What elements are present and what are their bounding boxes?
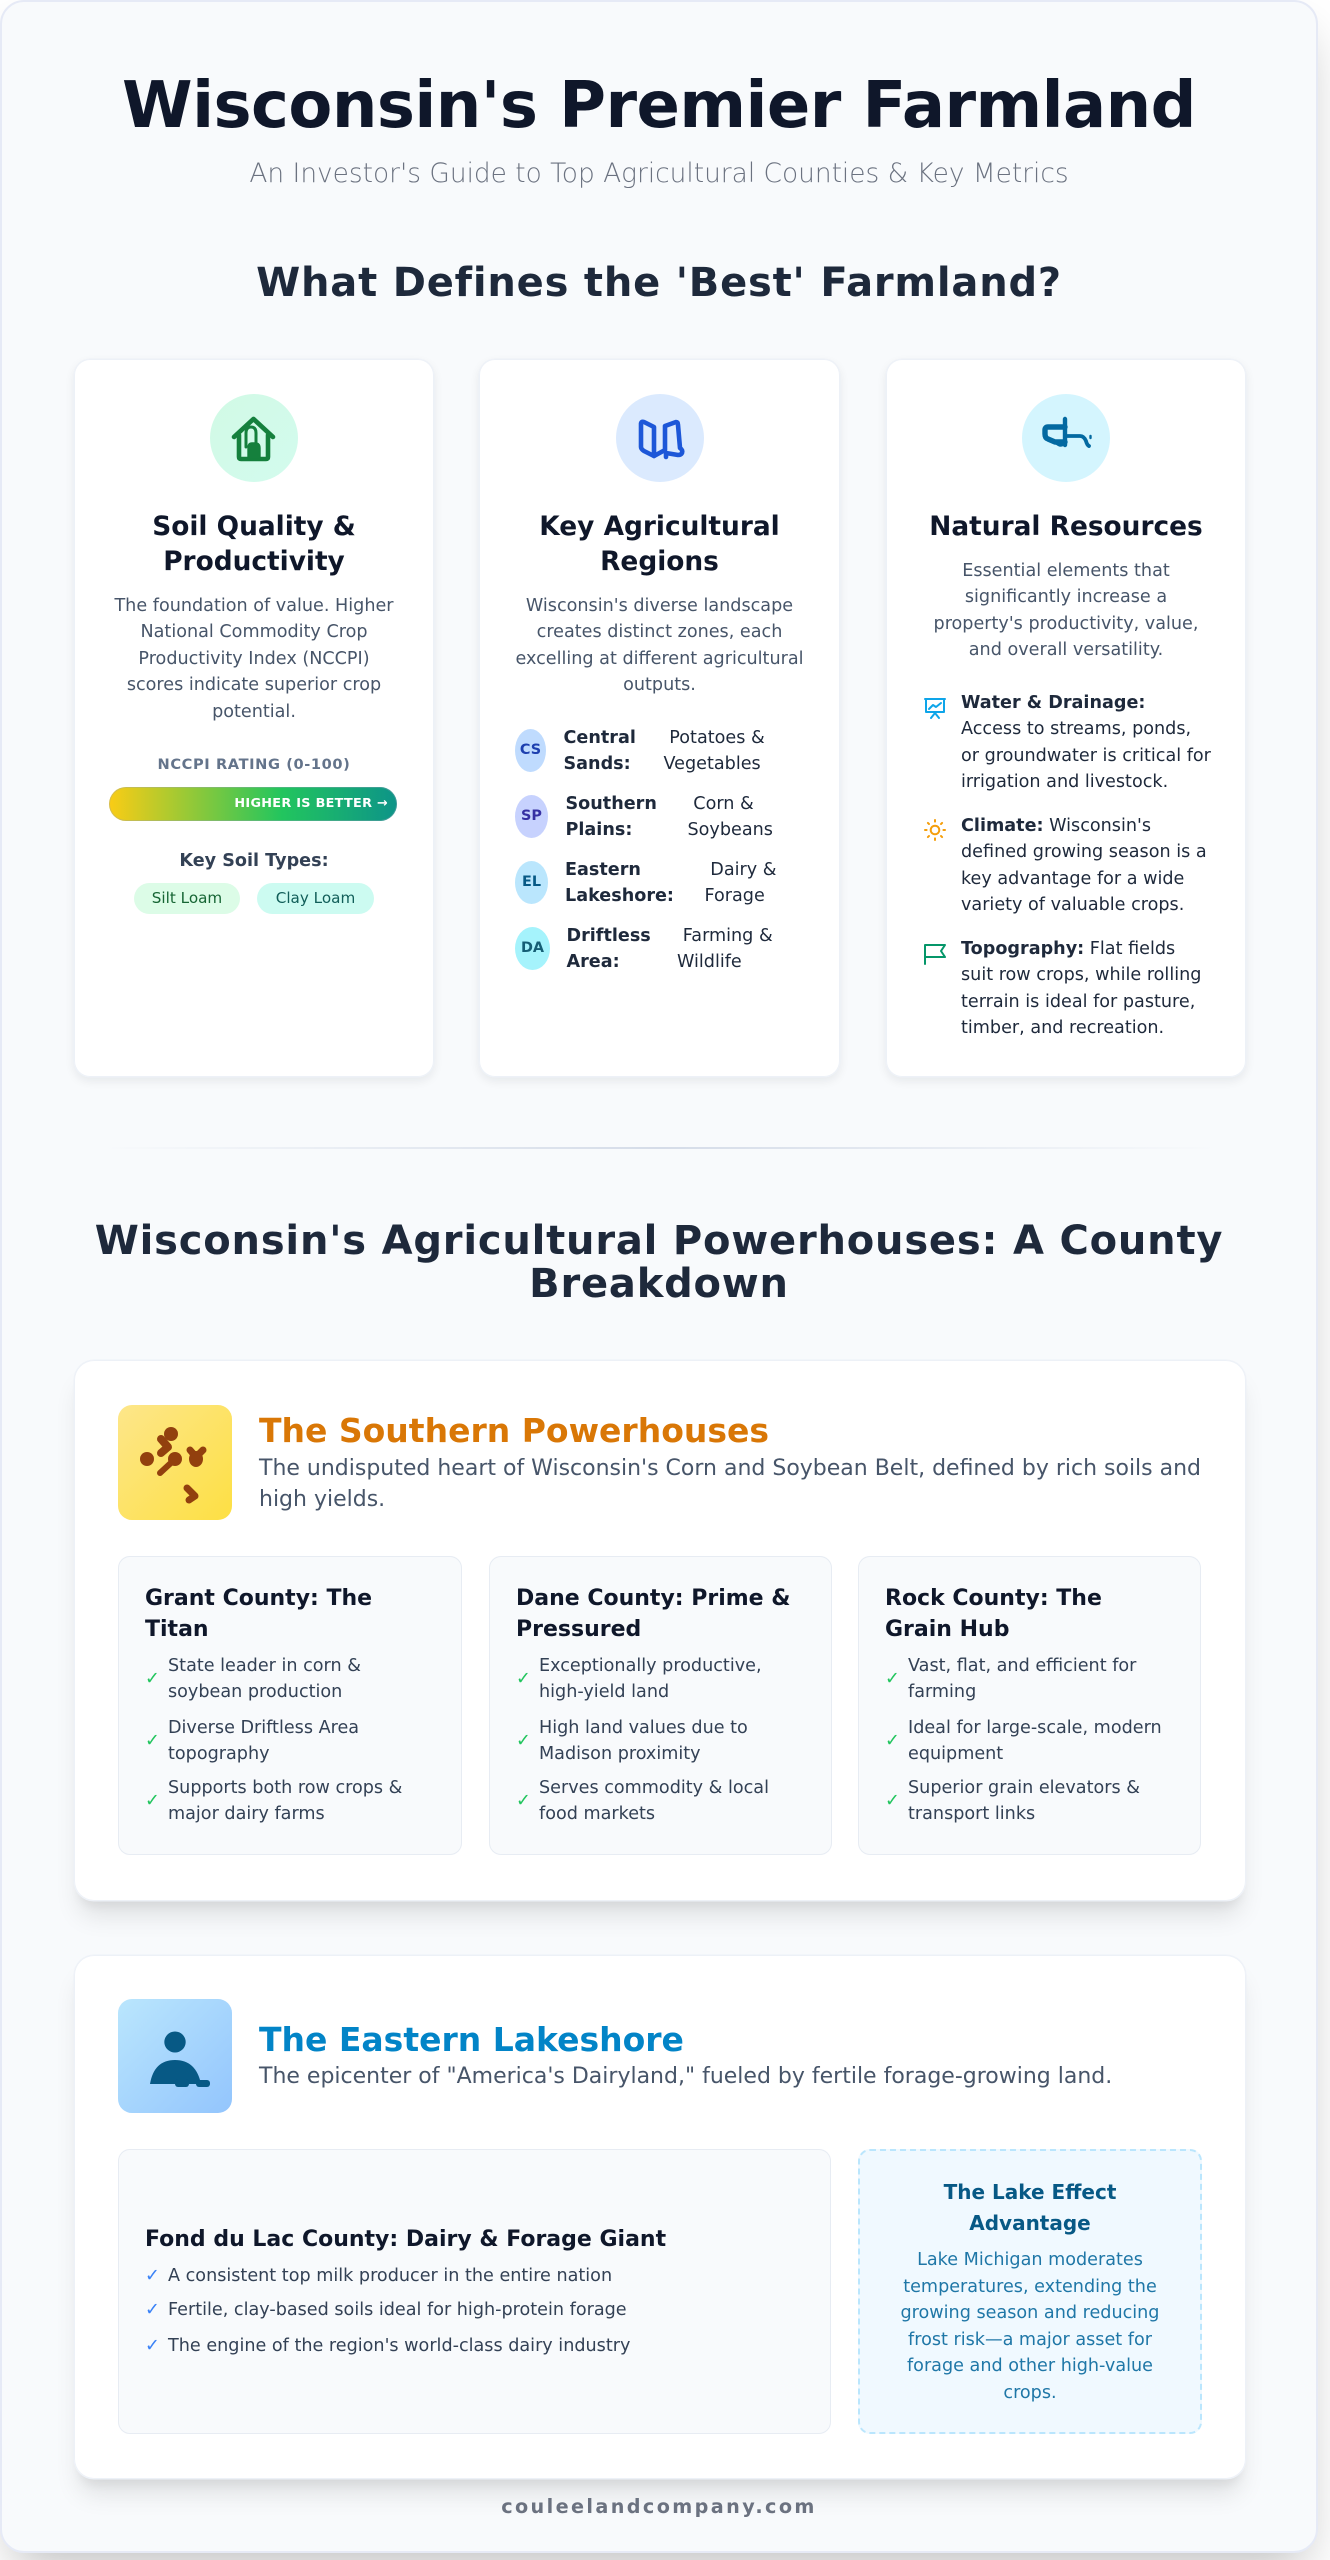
list: dane: high-yield land xyxy=(539,1682,669,1702)
heading: soil quality: Soil Quality & xyxy=(152,511,356,542)
text: water and drainage: Access to streams, ponds, xyxy=(961,719,1191,739)
text: resources description: and overall versatility. xyxy=(969,640,1163,660)
text: lake effect: temperatures, extending the xyxy=(903,2276,1157,2296)
badge: EL: EL xyxy=(522,874,541,890)
text: resources description: property's productivity, value, xyxy=(934,614,1198,634)
checks: rock: ✓ xyxy=(885,1669,900,1689)
heading: grant county: Grant County: The xyxy=(145,1586,372,1611)
icon: dairy farmer xyxy=(118,1999,232,2113)
text: farming xyxy=(677,926,773,972)
label: driftless area: Area: xyxy=(566,952,620,972)
heading: lake effect: Advantage xyxy=(969,2211,1091,2235)
heading: lake effect: The Lake Effect xyxy=(944,2180,1116,2204)
heading: county breakdown xyxy=(95,1218,1223,1307)
panel: key regions xyxy=(479,359,840,1077)
text: lake effect: forage and other high-value xyxy=(907,2356,1153,2376)
label: central sands: Central xyxy=(564,728,636,748)
checks: grant xyxy=(145,1669,160,1811)
label: eastern lakeshore: Lakeshore: xyxy=(565,886,674,906)
checks: dane: ✓ xyxy=(516,1731,531,1751)
text: lake effect: crops. xyxy=(1003,2382,1057,2402)
subtitle: An Investor's Guide to Top Agricultural Counties & Key Metrics xyxy=(249,158,1069,189)
pill: silt loam: Silt Loam xyxy=(152,889,222,907)
badge: SP xyxy=(515,795,548,838)
list: dane 2: High land values due to xyxy=(539,1718,748,1738)
icon: chart board xyxy=(924,698,946,719)
list: driftless area xyxy=(515,926,773,972)
heading: rock county xyxy=(885,1586,1102,1642)
checks: rock: ✓ xyxy=(885,1791,900,1811)
footer: couleelandcompany.com xyxy=(501,2495,817,2518)
list: grant: State leader in corn & xyxy=(168,1656,361,1676)
text: water and drainage: irrigation and livestock. xyxy=(961,772,1168,792)
list: dane 2: Madison proximity xyxy=(539,1744,701,1764)
label: nccpi rating: NCCPI RATING (0-100) xyxy=(158,756,350,773)
list: fond du lac 3: The engine of the region's world-class dairy industry xyxy=(168,2336,630,2356)
text: soil description: Productivity Index (NCCPI) xyxy=(138,649,370,669)
panel: southern powerhouses xyxy=(74,1360,1246,1901)
checks: rock xyxy=(885,1669,900,1811)
heading: key regions xyxy=(539,511,780,577)
text: corn: Corn & xyxy=(693,794,754,814)
list: grant 2: topography xyxy=(168,1744,270,1764)
heading: soil quality xyxy=(152,511,356,577)
checks: dane: ✓ xyxy=(516,1791,531,1811)
text: soil description: potential. xyxy=(212,702,296,722)
text: lake effect: Lake Michigan moderates xyxy=(917,2250,1143,2270)
panel: soil quality xyxy=(74,359,434,1077)
badge: CS xyxy=(515,729,546,772)
label: central sands: Sands: xyxy=(564,754,631,774)
list: central sands xyxy=(515,728,765,774)
text: climate: variety of valuable crops. xyxy=(961,895,1184,915)
heading: grant county: Titan xyxy=(145,1617,209,1642)
list: rock: farming xyxy=(908,1682,976,1702)
list: dane xyxy=(539,1656,762,1702)
text: water and drainage: Water & Drainage: xyxy=(961,693,1145,713)
list: fond du lac 2: Fertile, clay-based soils ideal for high-protein forage xyxy=(168,2300,627,2320)
list: dane 3: food markets xyxy=(539,1804,655,1824)
heading: county breakdown: Wisconsin's Agricultural Powerhouses: A County xyxy=(95,1218,1223,1264)
text: climate: key advantage for a wide xyxy=(961,869,1184,889)
text: soil description: The foundation of value. Higher xyxy=(114,596,394,616)
text: topography: Topography: Flat fields xyxy=(961,939,1175,959)
icon: map xyxy=(616,394,704,482)
card: fond du lac xyxy=(118,2149,831,2434)
text: southern description: The undisputed heart of Wisconsin's Corn and Soybean Belt, defined by rich soils and xyxy=(259,1456,1201,1481)
label: eastern lakeshore xyxy=(565,860,674,906)
text: topography: terrain is ideal for pasture, xyxy=(961,992,1195,1012)
list: rock 2: equipment xyxy=(908,1744,1003,1764)
text: lake effect xyxy=(858,2247,1202,2406)
panel: eastern lakeshore xyxy=(74,1955,1246,2479)
text: southern description: high yields. xyxy=(259,1487,385,1512)
heading: what defines: What Defines the 'Best' Farmland? xyxy=(256,260,1062,306)
list: grant 3 xyxy=(168,1778,402,1824)
text: regions description: Wisconsin's diverse landscape xyxy=(526,596,793,616)
text: soil description xyxy=(114,596,394,722)
icon: faucet xyxy=(1022,394,1110,482)
text: potatoes: Vegetables xyxy=(664,754,761,774)
label: eastern lakeshore: Eastern xyxy=(565,860,641,880)
card: grant county xyxy=(118,1556,462,1855)
list: grant 2: Diverse Driftless Area xyxy=(168,1718,359,1738)
text: resources description: Essential elements that xyxy=(962,561,1170,581)
heading: county breakdown: Breakdown xyxy=(529,1261,789,1307)
checks: dane xyxy=(516,1669,531,1811)
heading: fond du lac: Fond du Lac County: Dairy & Forage Giant xyxy=(145,2227,666,2252)
list: rock xyxy=(908,1653,1136,1705)
text: dairy xyxy=(704,860,776,906)
text: climate xyxy=(961,816,1207,915)
text: climate: defined growing season is a xyxy=(961,842,1207,862)
heading: key soil types: Key Soil Types: xyxy=(179,851,329,871)
list: grant xyxy=(168,1656,361,1702)
checks: grant: ✓ xyxy=(145,1791,160,1811)
text: regions description xyxy=(515,596,804,695)
item: climate xyxy=(924,816,1207,915)
text: corn xyxy=(688,794,773,840)
list: dane: Exceptionally productive, xyxy=(539,1656,762,1676)
heading: rock county: Grain Hub xyxy=(885,1617,1009,1642)
text: dairy: Forage xyxy=(704,886,765,906)
heading: grant county xyxy=(145,1586,372,1642)
pill: silt loam xyxy=(134,883,240,914)
checks: fond du lac xyxy=(145,2263,165,2363)
text: topography: suit row crops, while rolling xyxy=(961,965,1201,985)
badge: CS: CS xyxy=(520,742,541,758)
list: rock 3: transport links xyxy=(908,1804,1035,1824)
heading: dane county xyxy=(516,1586,790,1642)
label: southern plains xyxy=(566,794,657,840)
text: regions description: creates distinct zones, each xyxy=(537,622,782,642)
heading: southern powerhouses: The Southern Powerhouses xyxy=(259,1411,769,1450)
list: rock: Vast, flat, and efficient for xyxy=(908,1656,1136,1676)
badge: SP: SP xyxy=(521,808,542,824)
text: lake effect: growing season and reducing xyxy=(900,2303,1159,2323)
text: topography xyxy=(961,939,1201,1038)
heading: soil quality: Productivity xyxy=(163,546,345,577)
text: regions description: excelling at different agricultural xyxy=(515,649,804,669)
label: southern plains: Plains: xyxy=(566,820,632,840)
text: potatoes xyxy=(664,728,765,774)
list: dane 2 xyxy=(539,1718,748,1764)
list: rock 3 xyxy=(908,1775,1140,1827)
heading: natural resources: Natural Resources xyxy=(929,511,1203,542)
text: water and drainage: or groundwater is critical for xyxy=(961,746,1211,766)
text: topography: timber, and recreation. xyxy=(961,1018,1164,1038)
list: rock 3: Superior grain elevators & xyxy=(908,1778,1140,1798)
text: water and drainage xyxy=(961,693,1211,792)
list: grant 3: major dairy farms xyxy=(168,1804,325,1824)
list: fond du lac: A consistent top milk producer in the entire nation xyxy=(168,2266,612,2286)
checks: grant: ✓ xyxy=(145,1669,160,1689)
list: dane 3: Serves commodity & local xyxy=(539,1778,769,1798)
callout: lake effect xyxy=(858,2149,1202,2434)
pill: clay loam xyxy=(257,883,374,914)
list: grant: soybean production xyxy=(168,1682,342,1702)
text: farming: Farming & xyxy=(683,926,773,946)
icon: flag xyxy=(924,944,946,965)
card: rock county xyxy=(858,1556,1201,1855)
badge: DA xyxy=(515,927,550,970)
list: dane 3 xyxy=(539,1778,769,1824)
heading: key regions: Key Agricultural xyxy=(539,511,780,542)
text: lake effect: frost risk—a major asset for xyxy=(908,2330,1152,2350)
icon: soil house xyxy=(210,394,298,482)
badge: DA: DA xyxy=(521,940,544,956)
checks: fond du lac: ✓ xyxy=(145,2300,160,2320)
text: corn: Soybeans xyxy=(688,820,773,840)
text: southern description xyxy=(258,1456,1201,1512)
text: dairy: Dairy & xyxy=(710,860,776,880)
icon: sun xyxy=(924,819,946,841)
pill: clay loam: Clay Loam xyxy=(276,889,355,907)
text: soil description: National Commodity Crop xyxy=(140,622,368,642)
heading: dane county: Dane County: Prime & xyxy=(516,1586,790,1611)
checks: grant: ✓ xyxy=(145,1731,160,1751)
text: eastern description: The epicenter of "America's Dairyland," fueled by fertile forage-growing land. xyxy=(259,2064,1112,2089)
heading: key regions: Regions xyxy=(600,546,719,577)
text: resources description xyxy=(934,561,1198,660)
text: regions description: outputs. xyxy=(623,675,696,695)
text: resources description: significantly increase a xyxy=(965,587,1167,607)
heading: eastern lakeshore: The Eastern Lakeshore xyxy=(259,2020,684,2059)
text: climate: Climate: Wisconsin's xyxy=(961,816,1151,836)
label: driftless area: Driftless xyxy=(566,926,651,946)
badge: EL xyxy=(515,861,548,904)
heading: dane county: Pressured xyxy=(516,1617,641,1642)
label: driftless area xyxy=(566,926,651,972)
list: grant 2 xyxy=(168,1718,359,1764)
checks: fond du lac: ✓ xyxy=(145,2266,160,2286)
item: topography xyxy=(924,939,1201,1038)
heading: lake effect xyxy=(858,2177,1202,2239)
icon: corn seeds xyxy=(118,1405,232,1520)
chart: nccpi gradient bar: HIGHER IS BETTER → xyxy=(234,796,388,811)
heading: rock county: Rock County: The xyxy=(885,1586,1102,1611)
title: Wisconsin's Premier Farmland xyxy=(122,69,1196,143)
chart: nccpi gradient bar xyxy=(109,787,397,821)
panel: natural resources xyxy=(886,359,1246,1077)
text: potatoes: Potatoes & xyxy=(669,728,765,748)
checks: rock: ✓ xyxy=(885,1731,900,1751)
checks: dane: ✓ xyxy=(516,1669,531,1689)
item: water and drainage xyxy=(924,693,1211,792)
label: southern plains: Southern xyxy=(566,794,657,814)
text: farming: Wildlife xyxy=(677,952,742,972)
card: dane county xyxy=(489,1556,832,1855)
list: rock 2 xyxy=(908,1715,1162,1767)
list: rock 2: Ideal for large-scale, modern xyxy=(908,1718,1162,1738)
list: southern plains xyxy=(515,794,773,840)
list: eastern lakeshore xyxy=(515,860,776,906)
list: grant 3: Supports both row crops & xyxy=(168,1778,402,1798)
checks: fond du lac: ✓ xyxy=(145,2336,160,2356)
label: central sands xyxy=(564,728,636,774)
text: soil description: scores indicate superior crop xyxy=(127,675,381,695)
